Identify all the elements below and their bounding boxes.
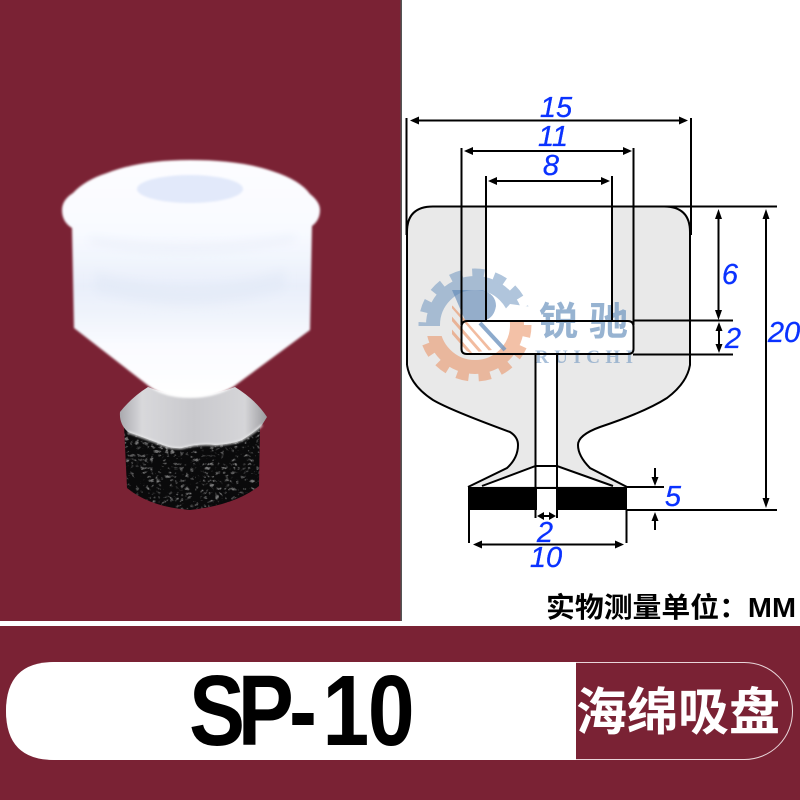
dimension values: 11: [538, 121, 568, 153]
gear orange half: [422, 322, 532, 382]
black sponge section: [468, 487, 627, 510]
panel: title band: [0, 626, 800, 800]
translucent silicone body: [62, 160, 320, 398]
product type: 海绵吸盘: [576, 684, 780, 741]
skirt rim highlight: [128, 425, 262, 448]
gear blue half: [418, 268, 528, 326]
product photo: sponge suction cup: [62, 160, 320, 510]
unit note: 实物测量单位：MM: [546, 591, 796, 623]
title pill: [6, 662, 792, 760]
dimension values: 8: [543, 150, 559, 182]
watermark text: 锐 驰: [539, 291, 628, 347]
dimension values: 15: [540, 92, 573, 124]
dimension arrows: [410, 116, 770, 548]
top opening: [137, 175, 243, 203]
panel: technical drawing: [406, 92, 800, 574]
panel: product photo background: [0, 0, 402, 622]
grey cup section: [407, 206, 690, 487]
model name: SP-10: [189, 654, 415, 767]
band shading on body: [90, 238, 295, 305]
dimension values: 2: [724, 323, 741, 355]
white cavities: [462, 206, 634, 486]
white band above title: [0, 621, 800, 626]
extension lines: [406, 118, 777, 543]
inner cavity outline: [462, 176, 634, 518]
grey flared skirt: [120, 387, 267, 448]
black sponge foot: [124, 425, 260, 510]
watermark: Ruichi logo: [423, 273, 633, 377]
dimension values: 5: [665, 481, 682, 513]
dimension values: 2: [536, 517, 553, 549]
cup outline: [407, 206, 690, 487]
dimension values: 20: [767, 317, 800, 349]
dimension values: [530, 92, 800, 574]
letter R mark: [452, 290, 496, 320]
dimension values: 10: [530, 542, 562, 574]
dimension values: 6: [722, 259, 739, 291]
watermark: Ruichi logo: RUICHI: [535, 347, 633, 368]
